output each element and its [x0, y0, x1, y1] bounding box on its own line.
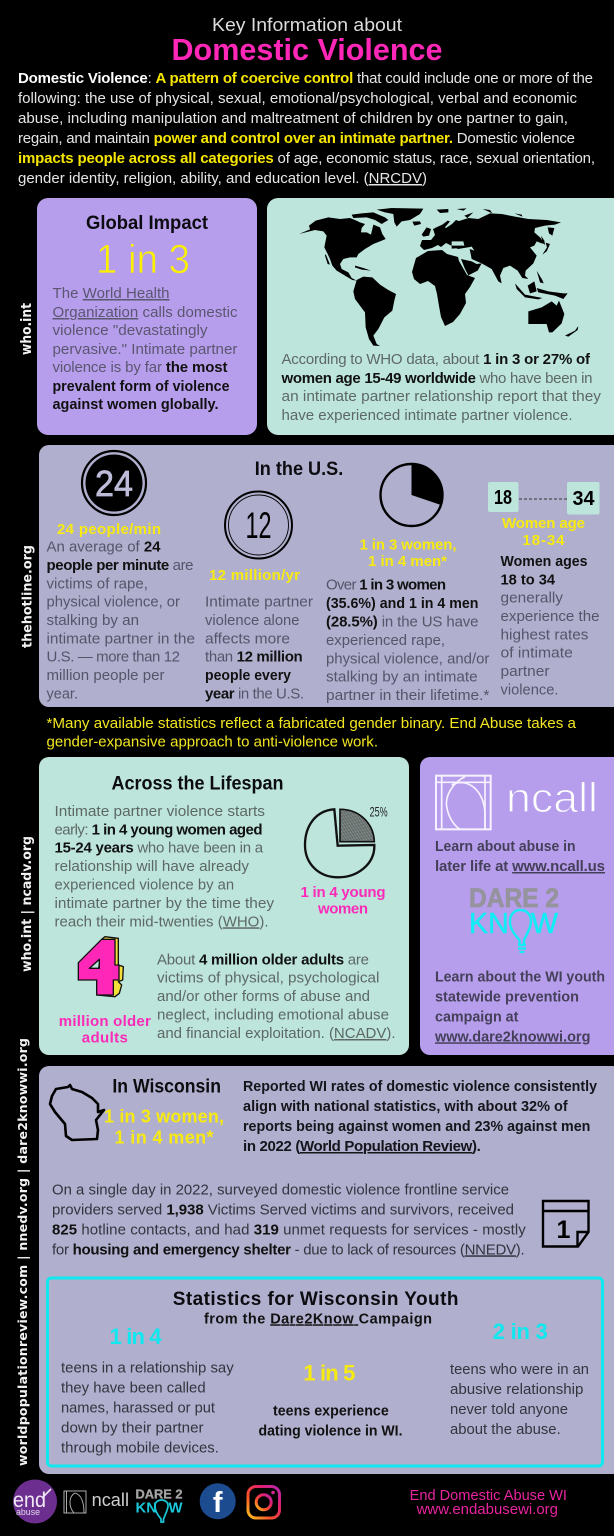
- stat: 24 people per minute: intimate partner in the: [46, 630, 195, 647]
- intro text block: abuse, including manipulation and maltreatment of children by one partner to gain,: [18, 110, 568, 127]
- intro text block: following: the use of physical, sexual, emotional/psychological, verbal and economic: [18, 90, 577, 107]
- stat: women age 18-34: violence.: [500, 681, 558, 698]
- stat: 24 people per minute: 24 people/min: [57, 521, 161, 538]
- panel: global impact: Organization calls domestic: [52, 304, 238, 321]
- stat: 1 in 3 women, 1 in 4 men: (35.6%) and 1 in 4 men: [326, 595, 478, 612]
- panel: global impact: The World Health: [52, 285, 170, 302]
- intro text block: regain, and maintain power and control over an intimate partner. Domestic violence: [18, 130, 575, 147]
- logo: small ncall: ncall: [92, 1490, 129, 1510]
- panel: world map: have experienced intimate partner violence.: [282, 407, 572, 424]
- stat: 24 people per minute: physical violence, or: [46, 594, 180, 611]
- stat: 1 in 5 teens: dating violence in WI.: [258, 1422, 402, 1439]
- stat: 12 million per year: [205, 492, 313, 702]
- panel: across the lifespan: Intimate partner violence starts: [54, 803, 265, 820]
- side label: thehotline.org: thehotline.org: [20, 545, 36, 648]
- icon: 18 to 34 range: 34: [572, 488, 595, 510]
- side label: who.int | ncadv.org: who.int | ncadv.org: [20, 836, 35, 972]
- icon: world map: [299, 208, 578, 346]
- panel: global impact: 1 in 3: [96, 236, 190, 282]
- stat: 1 in 4 teens: teens in a relationship say: [61, 1359, 234, 1376]
- intro text block: [18, 70, 595, 187]
- stat: 1 in 3 women, 1 in 4 men: [326, 464, 490, 704]
- panel: resources: [420, 757, 614, 1055]
- text: single day count: for housing and emergency shelter - due to lack of resources (NNEDV).: [52, 1241, 525, 1258]
- stat: women age 18-34: Women ages: [500, 553, 588, 570]
- logo: small dare 2 know: DARE 2: [136, 1488, 183, 1502]
- panel: across the lifespan: neglect, including emotional abuse: [157, 1007, 389, 1024]
- stat: 1 in 3 women, 1 in 4 men: experienced rape,: [326, 632, 445, 649]
- stat: 1 in 4 teens: names, harassed or put: [61, 1399, 216, 1416]
- stat: 2 in 3 teens: abusive relationship: [450, 1381, 583, 1398]
- stat: 1 in 5 teens: teens experience: [273, 1402, 389, 1419]
- stat: 2 in 3 teens: never told anyone: [450, 1401, 568, 1418]
- panel: global impact: pervasive." Intimate partner: [52, 341, 238, 358]
- stat: 2 in 3 teens: 2 in 3: [493, 1319, 548, 1344]
- footer contact text: [410, 1487, 567, 1518]
- stat: 1 in 3 women, 1 in 4 men: stalking by an intimate: [326, 669, 478, 686]
- logo: small dare 2 know: [136, 1488, 183, 1522]
- stat: 12 million per year: than 12 million: [205, 649, 303, 666]
- stat: 24 people per minute: stalking by an: [46, 612, 139, 629]
- stat: 1 in 3 women, 1 in 4 men: 1 in 3 women,: [360, 536, 456, 553]
- panel: across the lifespan: adults: [82, 1030, 128, 1047]
- logo: ncall: [436, 774, 598, 829]
- stat: women age 18-34: [488, 482, 600, 698]
- panel: in the U.S.: [39, 445, 614, 707]
- panel: in Wisconsin: Reported WI rates of domestic violence consistently: [243, 1078, 598, 1095]
- panel: Wisconsin youth statistics: Statistics for Wisconsin Youth: [173, 1289, 459, 1310]
- stat: women age 18-34: highest rates: [500, 626, 588, 643]
- stat: women age 18-34: 18 to 34: [500, 571, 556, 588]
- icon: hand-drawn 25% pie: 25%: [370, 804, 388, 820]
- title: [172, 15, 442, 67]
- logo: small dare 2 know: KNOW: [136, 1500, 183, 1516]
- side label: sources for Wisconsin: worldpopulationreview.com | nnedv.org | dare2knowwi.org: [15, 1038, 30, 1466]
- logo: end abuse: end: [13, 1489, 46, 1512]
- icon: 18 to 34 range: 18: [494, 487, 512, 509]
- icon: 18 to 34 range: [488, 482, 600, 514]
- panel: across the lifespan: and/or other forms of abuse and: [157, 988, 370, 1005]
- stat: women age 18-34: 18-34: [522, 532, 565, 549]
- footer contact text: End Domestic Abuse WI: [410, 1487, 567, 1504]
- stat: women age 18-34: generally: [500, 590, 564, 607]
- icon: 24 circle: 24: [95, 463, 133, 504]
- panel: across the lifespan: and financial exploitation. (NCADV).: [157, 1025, 396, 1042]
- panel: world map: an intimate partner relationship report that they: [282, 388, 602, 405]
- panel: across the lifespan: experienced violence by an: [54, 877, 234, 894]
- panel: in Wisconsin: In Wisconsin: [112, 1076, 221, 1097]
- panel: across the lifespan: women: [317, 901, 368, 918]
- panel: resources: statewide prevention: [435, 988, 579, 1005]
- stat: 1 in 3 women, 1 in 4 men: partner in their lifetime.*: [326, 687, 490, 704]
- panel: global impact: violence is by far the most: [52, 359, 228, 376]
- text: single day count: providers served 1,938 Victims Served victims and survivors, received: [52, 1201, 514, 1218]
- panel: resources: campaign at: [435, 1008, 518, 1025]
- icon: 12 circle: 12: [246, 505, 272, 546]
- panel: resources: www.dare2knowwi.org: [434, 1028, 590, 1045]
- stat: 24 people per minute: [46, 451, 195, 702]
- title: Key Information about: [212, 15, 402, 35]
- intro text block: Domestic Violence: A pattern of coercive control that could include one or more of the: [18, 70, 593, 87]
- panel: resources: Learn about abuse in: [435, 838, 576, 855]
- panel: Wisconsin youth statistics: [48, 1278, 602, 1466]
- logo: ncall: ncall: [506, 774, 598, 821]
- panel: Wisconsin youth statistics: from the Dare2Know Campaign: [204, 1311, 432, 1327]
- logo: dare 2 know: KNOW: [469, 908, 559, 940]
- text: single day count: [52, 1181, 526, 1258]
- stat: 24 people per minute: An average of 24: [46, 539, 161, 556]
- stat: 1 in 4 teens: down by their partner: [61, 1419, 204, 1436]
- stat: 1 in 3 women, 1 in 4 men: 1 in 4 men*: [368, 553, 447, 570]
- footer logos: [13, 1480, 280, 1524]
- icon: facebook: [200, 1483, 236, 1519]
- side label: who.int: who.int: [19, 303, 35, 355]
- icon: instagram: [248, 1486, 280, 1518]
- panel: across the lifespan: 1 in 4 young: [300, 884, 386, 901]
- panel: global impact: against women globally.: [52, 396, 218, 413]
- text: single day count: On a single day in 2022, surveyed domestic violence frontline service: [52, 1181, 509, 1198]
- stat: 24 people per minute: victims of rape,: [46, 575, 148, 592]
- stat: women age 18-34: of intimate: [500, 645, 573, 662]
- icon: facebook: f: [213, 1487, 223, 1519]
- footnote: gender binary: *Many available statistics reflect a fabricated gender binary. End Abuse takes a: [46, 715, 577, 732]
- intro text block: impacts people across all categories of age, economic status, race, sexual orientation,: [18, 150, 595, 167]
- icon: calendar: [543, 1201, 588, 1246]
- stat: women age 18-34: experience the: [500, 608, 600, 625]
- panel: world map: women age 15-49 worldwide who have been in: [280, 370, 592, 387]
- panel: across the lifespan: relationship will have already: [54, 858, 249, 875]
- stat: 1 in 3 women, 1 in 4 men: Over 1 in 3 women: [326, 577, 446, 594]
- stat: 1 in 3 women, 1 in 4 men: physical violence, and/or: [326, 650, 489, 667]
- stat: 2 in 3 teens: about the abuse.: [450, 1421, 561, 1438]
- text: single day count: 825 hotline contacts, and had 319 unmet requests for services - mostly: [52, 1221, 526, 1238]
- stat: 24 people per minute: year.: [46, 685, 78, 702]
- panel: across the lifespan: reach their mid-twenties (WHO).: [54, 913, 268, 930]
- icon: 24 circle: [82, 451, 146, 515]
- stat: women age 18-34: partner: [500, 663, 550, 680]
- icon: 12 circle: [225, 492, 292, 558]
- stat: women age 18-34: Women age: [502, 515, 585, 532]
- title: Domestic Violence: [172, 32, 442, 67]
- icon: calendar: 1: [557, 1216, 571, 1244]
- stat: 1 in 4 teens: 1 in 4: [110, 1324, 162, 1349]
- panel: global impact: [37, 198, 257, 435]
- stat: 12 million per year: 12 million/yr: [209, 567, 300, 584]
- panel: in Wisconsin: align with national statistics, with about 32% of: [243, 1098, 569, 1115]
- panel: in the U.S.: In the U.S.: [255, 459, 343, 480]
- stat: 24 people per minute: people per minute are: [46, 557, 194, 574]
- stat: 2 in 3 teens: teens who were in an: [450, 1361, 589, 1378]
- panel: across the lifespan: Across the Lifespan: [112, 773, 284, 794]
- stat: 12 million per year: Intimate partner: [205, 594, 313, 611]
- stat: 2 in 3 teens: [450, 1319, 589, 1438]
- panel: in Wisconsin: reports being against women and 23% against men: [243, 1118, 590, 1135]
- panel: global impact: prevalent form of violence: [52, 378, 230, 395]
- panel: in Wisconsin: 1 in 3 women,: [104, 1107, 224, 1127]
- panel: resources: Learn about the WI youth: [435, 968, 605, 985]
- panel: world map: [267, 198, 614, 435]
- stat: 24 people per minute: U.S. — more than 12: [46, 649, 180, 666]
- logo: end abuse: [13, 1480, 57, 1524]
- panel: across the lifespan: million older: [59, 1013, 151, 1030]
- panel: across the lifespan: About 4 million older adults are: [157, 951, 369, 968]
- footnote: gender binary: [46, 715, 577, 751]
- stat: 1 in 3 women, 1 in 4 men: (28.5%) in the US have: [326, 613, 478, 630]
- panel: across the lifespan: early: 1 in 4 young women aged: [54, 821, 262, 838]
- footnote: gender binary: gender-expansive approach to anti-violence work.: [46, 734, 378, 751]
- panel: world map: According to WHO data, about 1 in 3 or 27% of: [282, 351, 591, 368]
- intro text block: gender identity, religion, ability, and education level. (NRCDV): [18, 170, 427, 187]
- stat: 1 in 4 teens: [61, 1324, 234, 1456]
- stat: 12 million per year: year in the U.S.: [205, 685, 304, 702]
- panel: across the lifespan: 15-24 years who have been in a: [54, 840, 264, 857]
- logo: end abuse: abuse: [16, 1507, 40, 1517]
- panel: resources: later life at www.ncall.us: [435, 858, 605, 875]
- stat: 1 in 4 teens: they have been called: [61, 1379, 206, 1396]
- logo: dare 2 know: DARE 2: [469, 883, 559, 913]
- icon: pie chart: [380, 464, 443, 526]
- panel: across the lifespan: victims of physical, psychological: [157, 970, 379, 987]
- logo: small ncall: [64, 1490, 129, 1513]
- panel: across the lifespan: [39, 757, 409, 1055]
- stat: 12 million per year: affects more: [205, 630, 290, 647]
- icon: Wisconsin outline: [50, 1085, 104, 1140]
- panel: in Wisconsin: in 2022 (World Population Review).: [243, 1138, 481, 1155]
- footer contact text: www.endabusewi.org: [416, 1501, 558, 1518]
- panel: in Wisconsin: 1 in 4 men*: [114, 1127, 214, 1147]
- stat: 1 in 5 teens: 1 in 5: [303, 1361, 355, 1386]
- panel: global impact: Global Impact: [86, 213, 209, 234]
- panel: in Wisconsin: [39, 1066, 614, 1474]
- stat: 12 million per year: violence alone: [205, 612, 300, 629]
- icon: hand-drawn 25% pie: [305, 804, 388, 877]
- panel: global impact: violence "devastatingly: [52, 322, 208, 339]
- stat: 1 in 4 teens: through mobile devices.: [61, 1439, 219, 1456]
- stat: 24 people per minute: million people per: [46, 667, 164, 684]
- stat: 12 million per year: people every: [205, 667, 292, 684]
- logo: dare 2 know: [469, 883, 559, 952]
- panel: across the lifespan: intimate partner by the time they: [54, 895, 275, 912]
- icon: big number 4: [78, 937, 123, 997]
- stat: 1 in 5 teens: [258, 1361, 402, 1439]
